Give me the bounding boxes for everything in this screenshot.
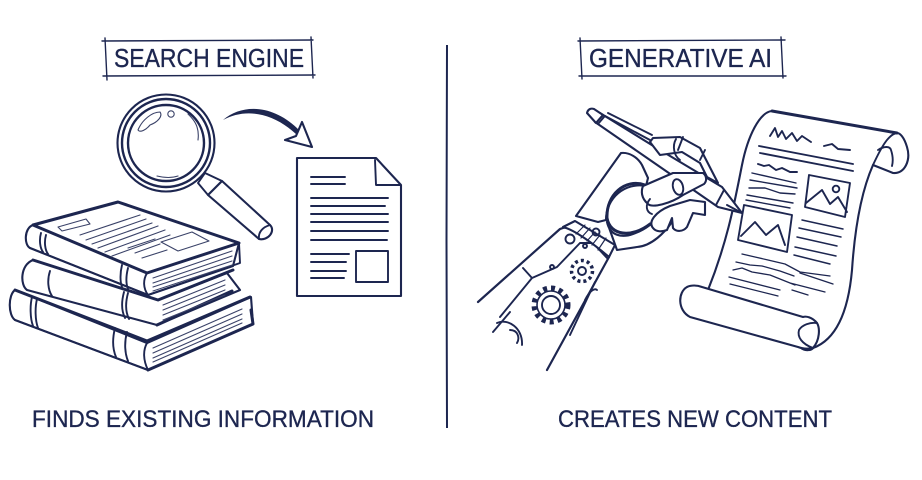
wrist xyxy=(563,221,615,257)
icon: magnifying glass xyxy=(118,94,272,239)
top book xyxy=(26,202,240,295)
icon: document xyxy=(297,158,401,296)
fingers xyxy=(642,137,718,231)
forearm xyxy=(478,227,609,370)
caption: creates new content: CREATES NEW CONTENT xyxy=(558,406,832,433)
icon: robotic arm with pen xyxy=(478,109,742,370)
scroll picture top xyxy=(805,175,850,217)
caption: finds existing information: FINDS EXISTING INFORMATION xyxy=(32,406,374,433)
pen xyxy=(587,109,742,213)
panel: search engine xyxy=(10,37,401,433)
icon: paper scroll xyxy=(680,111,908,350)
scroll lower lines xyxy=(729,220,843,296)
bottom book xyxy=(10,290,253,370)
document image box xyxy=(356,251,388,282)
heading: search engine: SEARCH ENGINE xyxy=(114,43,304,73)
icon: books stack xyxy=(10,202,253,370)
heading: generative ai xyxy=(578,37,786,79)
arrow: curved to document xyxy=(223,109,312,147)
palm and ring xyxy=(576,153,672,250)
heading: generative ai: GENERATIVE AI xyxy=(589,43,772,73)
scroll picture bottom xyxy=(738,205,792,252)
panel: generative ai xyxy=(478,37,908,433)
gears xyxy=(497,260,597,345)
center divider xyxy=(446,45,448,428)
scroll handwriting xyxy=(746,128,853,208)
document text lines xyxy=(311,177,388,278)
middle book xyxy=(22,260,240,325)
heading: search engine xyxy=(102,37,315,80)
scroll bottom roll xyxy=(680,286,819,349)
